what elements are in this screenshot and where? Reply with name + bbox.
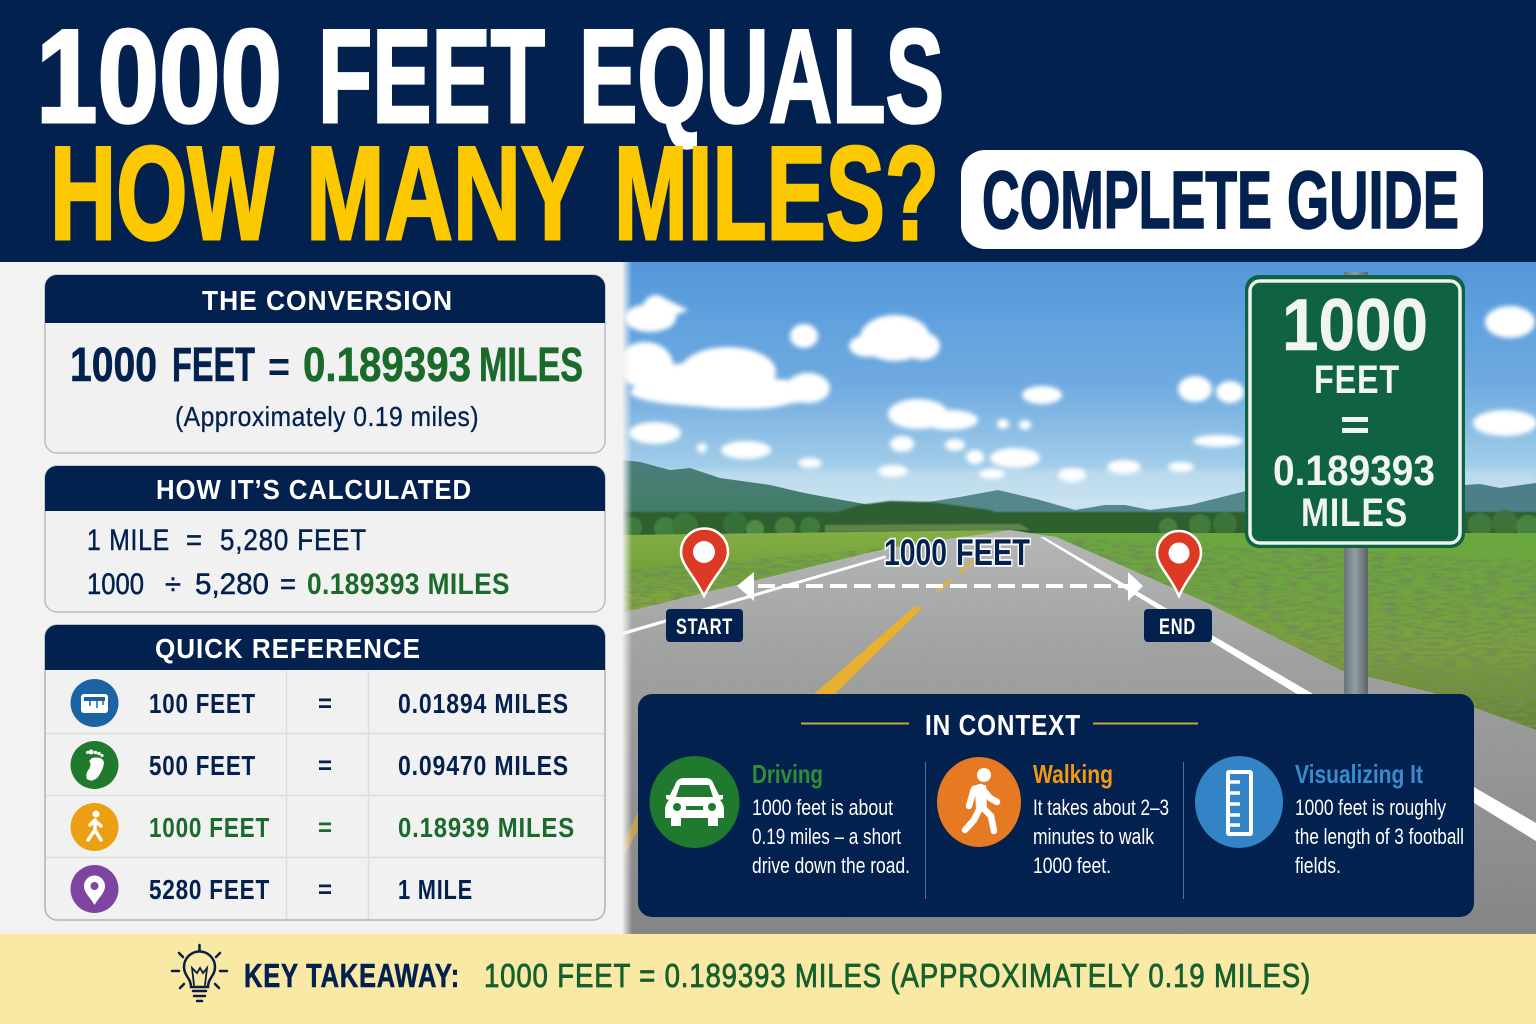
start pin (681, 528, 728, 596)
icon: lightbulb (172, 945, 227, 1001)
distance arrow (737, 572, 1143, 601)
panel: the conversion (45, 275, 605, 453)
title line two (50, 120, 939, 268)
row: 100 feet: 0.01894 MILES (398, 688, 569, 719)
row: 500 feet: 500 FEET (149, 750, 256, 781)
visualizing text (1295, 759, 1464, 878)
approximate note: (Approximately 0.19 miles) (175, 401, 479, 432)
driving text: 1000 feet is about (752, 795, 893, 820)
title line two: MANY (306, 120, 584, 268)
distance label (884, 532, 1030, 573)
title line one: FEET (318, 3, 545, 151)
title line one (36, 3, 944, 151)
icon: walking person (937, 757, 1021, 847)
conversion formula: 0.189393 (303, 339, 471, 392)
conversion formula: 1000 (70, 339, 157, 392)
driving text: 0.19 miles – a short (752, 824, 901, 849)
road sign (1245, 272, 1465, 694)
row: 500 feet: 0.09470 MILES (398, 750, 569, 781)
sign text: MILES (1301, 491, 1408, 535)
walking text (1033, 759, 1169, 878)
driving text (752, 759, 910, 878)
sign pole (1344, 272, 1368, 694)
road surface (622, 530, 1536, 934)
distance marker: 1000 feet (737, 532, 1143, 601)
row: 500 feet: = (318, 752, 332, 780)
calculation line one (87, 524, 367, 557)
calculation line two: = (280, 568, 296, 601)
conversion heading: THE CONVERSION (202, 285, 453, 316)
visualizing text: Visualizing It (1295, 759, 1423, 789)
calculation line one: 5,280 FEET (220, 524, 367, 557)
panel: how it's calculated (45, 466, 605, 612)
sign text: FEET (1314, 358, 1400, 402)
title line one: EQUALS (579, 3, 944, 151)
sign text (1273, 285, 1435, 535)
title line two: MILES? (614, 120, 939, 268)
road photo scene (617, 262, 1536, 934)
row: 5280 feet: = (318, 876, 332, 904)
panel: quick reference (45, 625, 605, 920)
road centre dashes (622, 560, 975, 860)
icon: ruler (1195, 756, 1283, 848)
row: 100 feet: = (318, 690, 332, 718)
visualizing text: 1000 feet is roughly (1295, 795, 1446, 820)
row: 5280 feet (70, 865, 473, 913)
driving text: Driving (752, 759, 823, 789)
start label (666, 609, 743, 642)
calculation line two: 1000 (87, 568, 144, 601)
calculation line two: ÷ (165, 568, 181, 601)
walking text: It takes about 2–3 (1033, 795, 1169, 820)
calculation line two: 5,280 (195, 568, 269, 601)
title line two: HOW (50, 120, 274, 268)
start label: START (676, 614, 733, 639)
walking text: 1000 feet. (1033, 853, 1111, 878)
visualizing text: fields. (1295, 853, 1341, 878)
title line one: 1000 (36, 3, 282, 151)
icon: car (650, 756, 740, 848)
row: 5280 feet: 1 MILE (398, 874, 473, 905)
row: 1000 feet highlighted (70, 803, 575, 851)
calculation line two (87, 568, 510, 601)
conversion formula (70, 339, 583, 392)
driving text: drive down the road. (752, 853, 910, 878)
calculation line one: 1 MILE (87, 524, 170, 557)
row: 1000 feet highlighted: 1000 FEET (149, 812, 270, 843)
quick reference heading: QUICK REFERENCE (155, 633, 421, 664)
panel: in context (638, 694, 1474, 917)
grass fields (622, 530, 1010, 613)
sign board (1245, 275, 1465, 548)
row: 100 feet (70, 679, 569, 727)
distance label: 1000 (884, 532, 947, 573)
takeaway label: KEY TAKEAWAY: (244, 957, 460, 994)
calculation line one: = (186, 524, 202, 557)
end label: END (1159, 614, 1196, 639)
sign text: 0.189393 (1273, 447, 1435, 495)
calculation line two: 0.189393 MILES (307, 568, 510, 601)
walking text: Walking (1033, 759, 1113, 789)
visualizing text: the length of 3 football (1295, 824, 1464, 849)
row: 1000 feet highlighted: 0.18939 MILES (398, 812, 575, 843)
complete guide badge: COMPLETE (982, 155, 1272, 246)
left edge fade (622, 262, 632, 934)
sign text: 1000 (1282, 285, 1428, 366)
in context heading: IN CONTEXT (925, 710, 1081, 742)
row: 1000 feet highlighted: = (318, 814, 332, 842)
walking text: minutes to walk (1033, 824, 1155, 849)
title banner (0, 0, 1536, 268)
key takeaway band (0, 934, 1536, 1024)
mountains (622, 460, 1536, 525)
road edge lines (622, 537, 1536, 841)
treeline (622, 501, 1536, 539)
conversion formula: FEET (172, 339, 255, 392)
clouds (617, 295, 1536, 482)
conversion formula: MILES (479, 339, 583, 392)
calculation heading: HOW IT’S CALCULATED (156, 474, 472, 505)
end label (1144, 609, 1212, 642)
end pin (1157, 531, 1201, 596)
takeaway text: 1000 FEET = 0.189393 MILES (APPROXIMATELY 0.19 MILES) (484, 957, 1311, 994)
distance label: FEET (956, 532, 1030, 573)
row: 100 feet: 100 FEET (149, 688, 256, 719)
row: 500 feet (70, 741, 569, 789)
haze near horizon (622, 470, 1536, 510)
row: 5280 feet: 5280 FEET (149, 874, 270, 905)
conversion formula: = (268, 343, 290, 390)
